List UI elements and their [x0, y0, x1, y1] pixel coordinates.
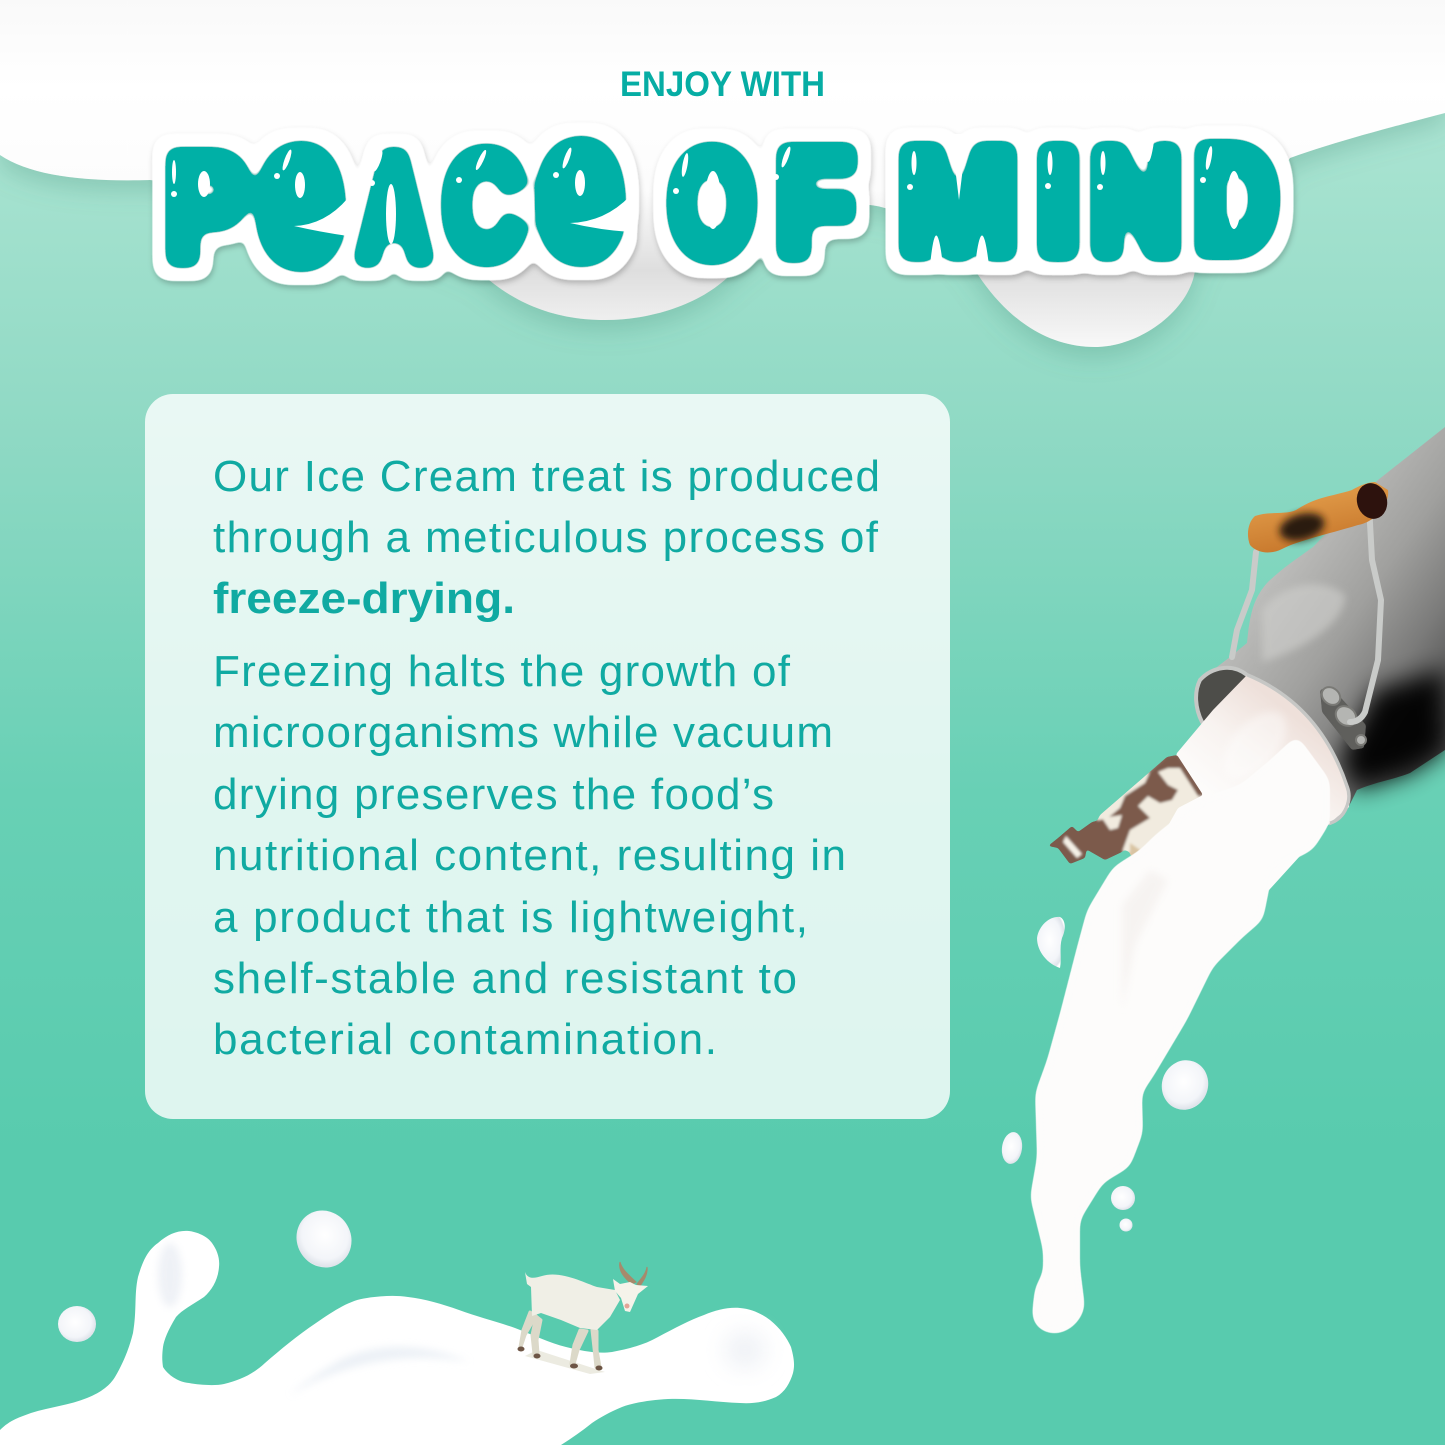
milk pour: back layer: [1140, 675, 1349, 900]
can rim edge over milk: [1247, 675, 1349, 823]
text block: process paragraph: shelf-stable and resistant to: [213, 954, 797, 1003]
handle end: [1353, 480, 1391, 522]
splash neck shading: [158, 1243, 182, 1307]
handle char: [1276, 508, 1328, 546]
title gloss highlights: [171, 134, 1241, 266]
goat legs: [520, 1312, 600, 1367]
milk pour: front stream: [1000, 735, 1330, 1334]
goat head: [613, 1279, 648, 1312]
text block: process paragraph: Freezing halts the growth of: [213, 647, 791, 696]
top milk drip: [0, 0, 1445, 347]
wire handle: [1232, 505, 1381, 722]
title: peace of mind: C: [444, 123, 524, 288]
milk drop tiny: [1120, 1218, 1132, 1232]
milk drop tail: [1037, 917, 1065, 968]
text block: intro paragraph: Our Ice Cream treat is produced: [213, 452, 880, 501]
title: peace of mind: e: [258, 82, 342, 299]
cow body: [1085, 755, 1203, 862]
can highlight: [1262, 584, 1345, 662]
text block: process paragraph: nutritional content, resulting in: [213, 831, 846, 880]
milk drop left: [58, 1306, 96, 1342]
wooden handle: [1248, 482, 1388, 552]
title: peace of mind: e: [538, 77, 622, 294]
text block: intro paragraph: freeze-drying.: [213, 574, 515, 623]
title: peace of mind: [166, 77, 1278, 299]
cow cream spots: [1102, 815, 1122, 830]
cow head: [1048, 826, 1088, 864]
illustration: cow: [1048, 755, 1203, 866]
stream shading: [1122, 870, 1168, 1010]
title: peace of mind: A: [358, 125, 430, 290]
can dark lower shadow: [1340, 670, 1445, 790]
title: peace of mind: P: [166, 125, 248, 289]
cow face blaze: [1063, 836, 1082, 858]
text block: intro paragraph: through a meticulous process of: [213, 513, 879, 562]
goat body: [525, 1272, 620, 1330]
text block: process paragraph: drying preserves the food’s: [213, 770, 774, 819]
goat nose: [624, 1304, 630, 1308]
can body: [1197, 427, 1445, 810]
illustration: milk splash: [0, 1231, 794, 1445]
cow leg: [1130, 843, 1152, 866]
text block: process paragraph: a product that is lightweight,: [213, 893, 808, 942]
rivet plate: [1320, 686, 1366, 750]
panel: freeze-drying explanation: [145, 394, 950, 1119]
title: peace of mind: I: [1037, 120, 1079, 284]
title: peace of mind: N: [1091, 118, 1181, 283]
milk drop top: [286, 1200, 362, 1278]
title: peace of mind: F: [776, 121, 854, 285]
text block: process paragraph: bacterial contamination.: [213, 1015, 717, 1064]
milk drop small: [1111, 1186, 1135, 1210]
goat hooves: [518, 1346, 602, 1370]
goat ground shadow: [525, 1350, 605, 1374]
cow patches: [1078, 755, 1203, 860]
title: peace of mind: M: [899, 119, 1017, 284]
text block: process paragraph: microorganisms while vacuum: [213, 708, 833, 757]
milk drop left: [1000, 1131, 1024, 1165]
splash shading: [290, 1347, 470, 1395]
title: peace of mind: D: [1194, 117, 1278, 281]
splash right shading: [725, 1332, 765, 1368]
illustration: goat: [518, 1262, 648, 1374]
can mouth rim: [1196, 668, 1349, 823]
illustration: milk can: [1196, 427, 1445, 823]
text block: process paragraph: [213, 647, 846, 1064]
rivets: [1318, 683, 1366, 745]
text block: intro paragraph: [213, 452, 880, 623]
milk drop large: [1155, 1054, 1215, 1116]
goat horns: [620, 1262, 647, 1286]
heading: enjoy with: ENJOY WITH: [620, 65, 825, 104]
title: peace of mind: O: [669, 120, 755, 286]
